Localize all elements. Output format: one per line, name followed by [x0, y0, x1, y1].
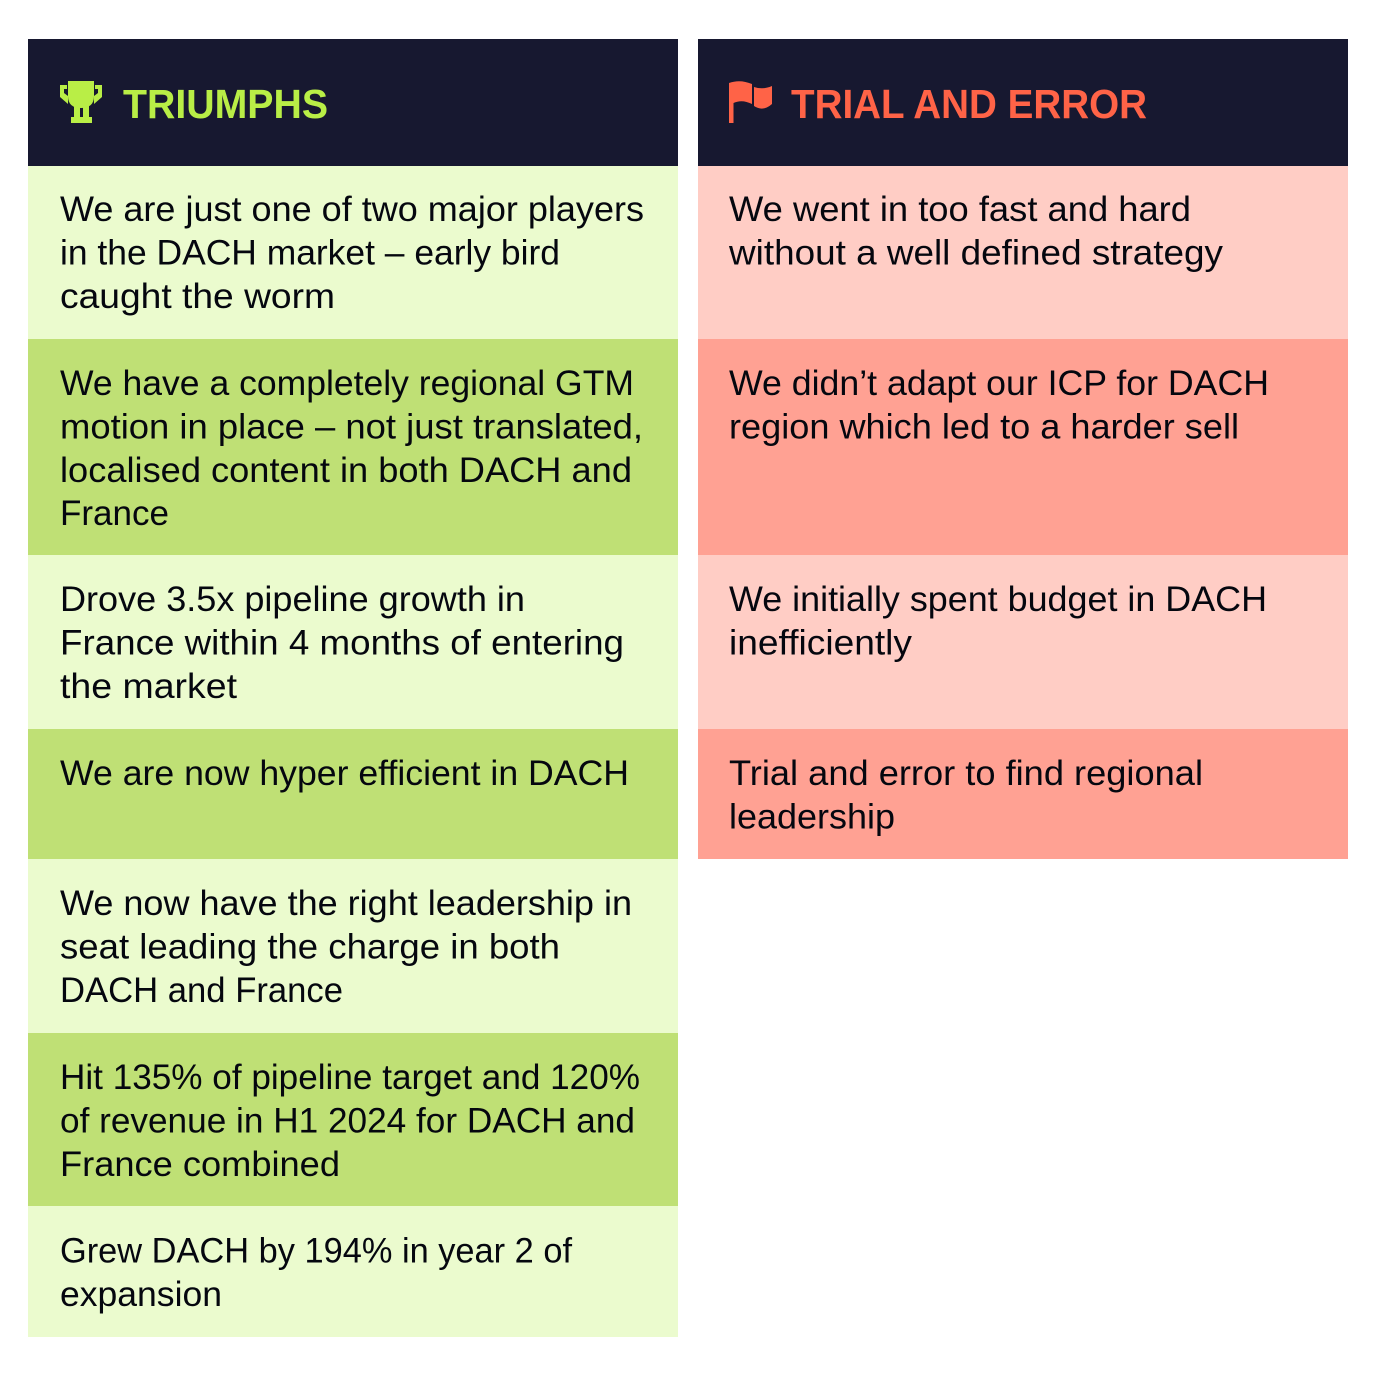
row: regional leadership	[698, 729, 1348, 859]
row: DACH growth	[28, 1206, 678, 1337]
heading: trial and error: TRIAL AND ERROR	[791, 81, 1147, 127]
icon: flag	[729, 81, 772, 123]
row: too fast and hard	[698, 166, 1348, 339]
row: ICP not adapted: We didn’t adapt our ICP for DACH	[729, 364, 1269, 403]
row: regional leadership: Trial and error to find regional	[729, 754, 1203, 793]
header: triumphs	[28, 39, 678, 166]
row: hyper efficient	[28, 729, 678, 859]
row: regional market position: in the DACH market – early bird	[60, 234, 560, 272]
row: inefficient budget: inefficiently	[729, 624, 913, 662]
row: ICP not adapted: region which led to a harder sell	[729, 408, 1239, 446]
row: regional GTM motion: localised content in both DACH and	[60, 451, 632, 490]
header: trial and error	[698, 39, 1348, 166]
row: right leadership: seat leading the charge in both	[60, 928, 560, 966]
icon: trophy	[60, 81, 102, 123]
row: pipeline growth in France: Drove 3.5x pipeline growth in	[60, 580, 525, 619]
row: regional GTM motion: motion in place – not just translated,	[60, 408, 643, 446]
row: inefficient budget	[698, 555, 1348, 729]
row: right leadership: We now have the right leadership in	[60, 884, 632, 923]
column: trial and error	[698, 39, 1348, 859]
row: pipeline and revenue targets: Hit 135% of pipeline target and 120%	[60, 1058, 640, 1097]
row: pipeline growth in France: France within 4 months of entering	[60, 624, 624, 662]
row: regional GTM motion: France	[60, 494, 169, 533]
row: pipeline and revenue targets	[28, 1033, 678, 1206]
row: regional market position: caught the worm	[60, 277, 335, 316]
row: pipeline growth in France	[28, 555, 678, 729]
row: regional market position: We are just one of two major players	[60, 190, 644, 229]
row: too fast and hard: without a well defined strategy	[728, 234, 1224, 272]
row: DACH growth: expansion	[60, 1275, 222, 1314]
row: regional GTM motion: We have a completely regional GTM	[60, 364, 634, 403]
row: right leadership	[28, 859, 678, 1033]
heading: triumphs: TRIUMPHS	[123, 81, 328, 127]
row: DACH growth: Grew DACH by 194% in year 2 of	[60, 1232, 572, 1270]
row: inefficient budget: We initially spent budget in DACH	[729, 580, 1267, 619]
row: too fast and hard: We went in too fast and hard	[729, 190, 1191, 229]
row: regional market position	[28, 166, 678, 339]
row: regional leadership: leadership	[729, 798, 895, 836]
row: pipeline and revenue targets: France combined	[60, 1145, 340, 1184]
row: pipeline growth in France: the market	[60, 667, 237, 706]
row: regional GTM motion	[28, 339, 678, 555]
column: triumphs	[28, 39, 678, 1337]
row: right leadership: DACH and France	[60, 971, 343, 1010]
row: ICP not adapted	[698, 339, 1348, 555]
row: pipeline and revenue targets: of revenue in H1 2024 for DACH and	[60, 1102, 635, 1140]
row: hyper efficient: We are now hyper efficient in DACH	[60, 754, 629, 793]
